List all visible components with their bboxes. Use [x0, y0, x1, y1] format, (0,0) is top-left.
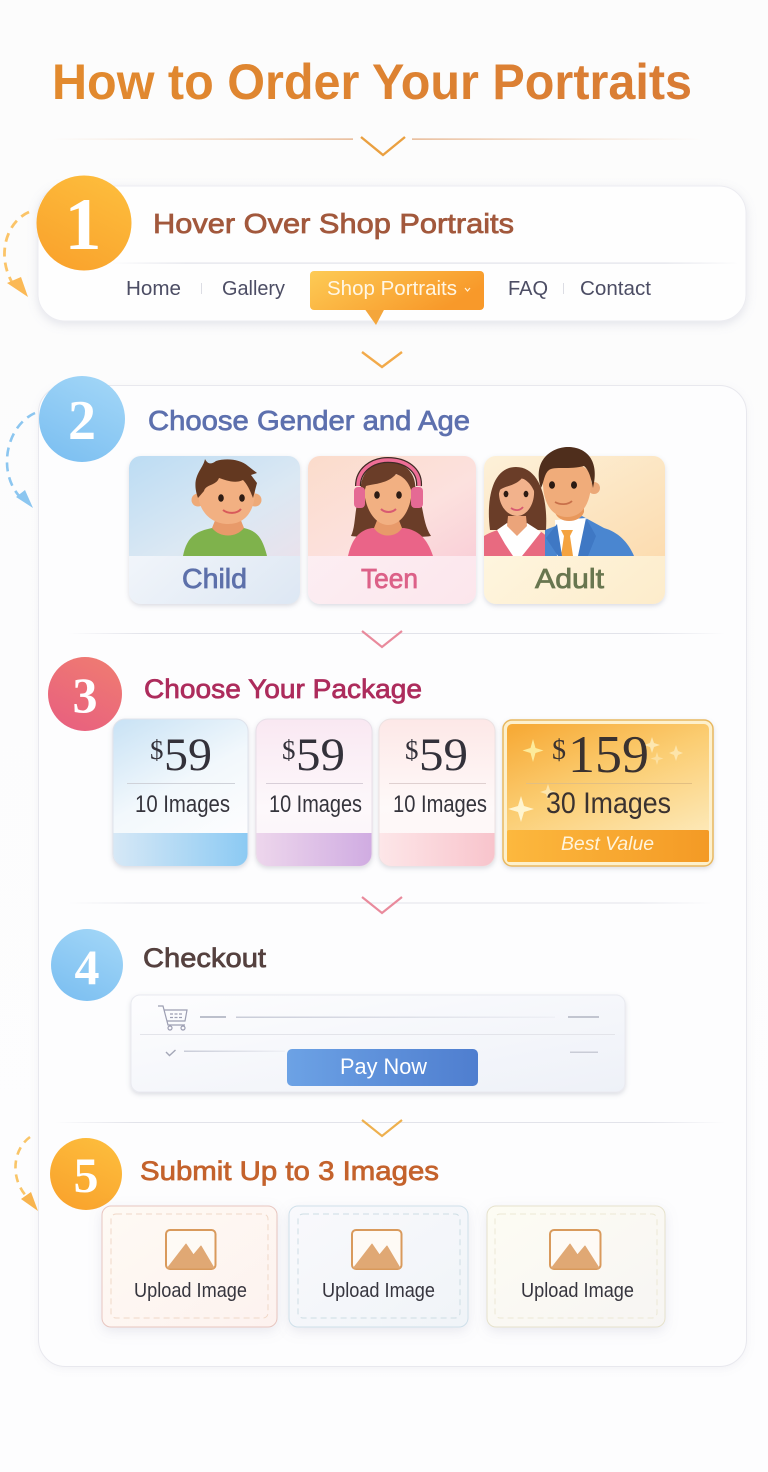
- card: package 4 best value: 159: [568, 726, 649, 784]
- arrow: chevron step 1 to 2: [362, 352, 402, 367]
- step 5: submit images: [50, 1138, 665, 1327]
- card: package 1: 10 Images: [135, 791, 230, 818]
- badge: number 4: [51, 929, 123, 1001]
- icon: cart: [158, 1006, 187, 1030]
- card: package 4 best value: [503, 720, 713, 866]
- step 4: checkout: [51, 929, 625, 1092]
- arrow: chevron step 3 to 4: [362, 897, 402, 913]
- navigation bar: Gallery: [222, 278, 285, 300]
- label: teen: Teen: [361, 563, 418, 594]
- label: adult: Adult: [535, 563, 604, 594]
- heading: step 4: Checkout: [143, 943, 267, 973]
- card: child: [129, 456, 300, 604]
- panel: step 1 hover over shop portraits: [36, 176, 746, 325]
- icon: adult couple portrait: [484, 447, 634, 556]
- heading: step 1: Hover Over Shop Portraits: [153, 208, 514, 239]
- upload card 1: Upload Image: [134, 1280, 247, 1302]
- card: package 3: 10 Images: [393, 791, 487, 818]
- card: package 3: $: [405, 735, 418, 765]
- arrow: chevron step 2 to 3: [362, 631, 402, 647]
- card: package 3: 59: [419, 729, 468, 781]
- upload card 2: [289, 1206, 468, 1327]
- card: package 2: 59: [296, 729, 345, 781]
- upload card 3: [487, 1206, 665, 1327]
- card: package 4 best value: $: [552, 735, 566, 766]
- card: package 2: 10 Images: [269, 791, 362, 818]
- label: child: Child: [182, 563, 247, 594]
- upload card 1: [102, 1206, 277, 1327]
- icon: check: [166, 1050, 176, 1056]
- arrow: chevron step 4 to 5: [362, 1120, 402, 1136]
- icon: image placeholder: [550, 1230, 600, 1269]
- icon: sparkles: [508, 737, 683, 822]
- icon: child portrait: [183, 459, 267, 556]
- icon: image placeholder: [352, 1230, 402, 1269]
- button: pay now: [287, 1049, 478, 1086]
- arrow: dashed step 2: [7, 413, 35, 508]
- title divider with chevron: [50, 137, 702, 155]
- badge: number 2: 2: [68, 390, 96, 452]
- heading: step 3: Choose Your Package: [144, 674, 422, 704]
- step 2: choose gender and age: [39, 376, 665, 604]
- heading: step 2: Choose Gender and Age: [148, 405, 470, 436]
- navigation bar: FAQ: [508, 278, 548, 300]
- arrow: dashed step 1: [4, 212, 29, 297]
- upload card 2: Upload Image: [322, 1280, 435, 1302]
- badge: number 5: [50, 1138, 122, 1210]
- heading: step 5: Submit Up to 3 Images: [140, 1156, 439, 1186]
- card: package 4 best value: 30 Images: [546, 787, 671, 820]
- navigation bar: Home: [126, 278, 181, 300]
- card: teen: [308, 456, 476, 604]
- card: package 4 best value: Best Value: [561, 834, 654, 855]
- step 3: choose your package: [48, 657, 713, 866]
- badge: number 1: [36, 176, 132, 270]
- button: pay now: Pay Now: [340, 1054, 427, 1079]
- arrow: dashed step 5: [15, 1137, 38, 1211]
- icon: image placeholder: [166, 1230, 216, 1269]
- card: package 1: 59: [164, 729, 212, 781]
- title: How to Order Your Portraits: [52, 54, 692, 110]
- navigation bar: [126, 271, 651, 325]
- icon: teen portrait: [348, 460, 433, 556]
- badge: number 3: 3: [72, 667, 98, 723]
- card: package 2: [256, 719, 372, 866]
- navigation bar: Contact: [580, 278, 651, 300]
- card: adult: [484, 447, 665, 604]
- card: package 2: $: [282, 735, 296, 765]
- badge: number 3: [48, 657, 122, 731]
- upload card 3: Upload Image: [521, 1280, 634, 1302]
- card: package 1: [113, 719, 248, 866]
- badge: number 2: [39, 376, 125, 462]
- badge: number 1: 1: [64, 184, 102, 266]
- badge: number 5: 5: [74, 1147, 98, 1203]
- card: package 3: [379, 719, 495, 866]
- card: package 1: $: [150, 735, 164, 765]
- badge: number 4: 4: [74, 939, 100, 995]
- checkout form: [131, 995, 625, 1092]
- panel: steps 2 to 5: [38, 376, 746, 1366]
- navigation bar: Shop Portraits: [327, 278, 457, 300]
